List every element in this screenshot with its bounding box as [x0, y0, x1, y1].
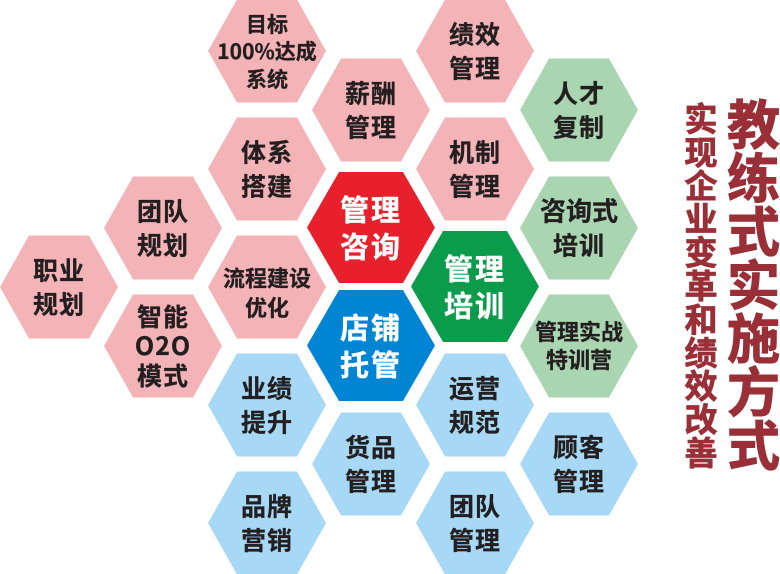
hexagon: 咨询式培训	[520, 176, 638, 280]
hexagon: 运营规范: 运营	[449, 370, 501, 406]
hexagon: 业绩提升	[208, 354, 326, 456]
core hexagon: 管理培训: 培训	[444, 284, 506, 326]
hexagon: 绩效管理: 管理	[449, 50, 501, 86]
hexagon: 业绩提升: 提升	[241, 404, 293, 440]
hexagon: 团队管理: 管理	[449, 522, 501, 558]
hexagon: 管理实战特训营	[520, 294, 638, 398]
hexagon: 品牌营销	[208, 472, 326, 574]
hexagon: 绩效管理	[416, 0, 534, 102]
hexagon: 流程建设优化	[208, 236, 326, 338]
hexagon: 人才复制: 人才	[553, 74, 605, 110]
subtitle: vertical text: 实现企业变革和绩效改善	[684, 93, 718, 475]
hexagon: 体系搭建	[208, 118, 326, 220]
hexagon: 团队管理: 团队	[449, 488, 501, 524]
core hexagon: 管理培训: 管理	[444, 246, 506, 288]
hexagon: 目标100%达成系统: 系统	[246, 64, 288, 94]
hexagon: 流程建设优化: 优化	[245, 291, 289, 323]
hexagon: 职业规划: 职业	[33, 252, 85, 288]
hexagon: 顾客管理: 顾客	[553, 428, 605, 464]
main title: vertical text: 教练式实施方式	[727, 84, 780, 481]
hexagon: 体系搭建: 体系	[241, 134, 293, 170]
hexagon: 机制管理	[416, 118, 534, 220]
hexagon: 咨询式培训: 咨询式	[540, 192, 618, 228]
hexagon: 运营规范	[416, 354, 534, 456]
hexagon: 管理实战特训营: 特训营	[546, 343, 612, 375]
hexagon: 流程建设优化: 流程建设	[223, 262, 311, 294]
hexagon: 货品管理: 管理	[345, 462, 397, 498]
hexagon: 薪酬管理: 薪酬	[345, 74, 397, 110]
hexagon: 咨询式培训: 培训	[553, 226, 605, 262]
hexagon: 体系搭建: 搭建	[241, 168, 293, 204]
hexagon: 管理实战特训营: 管理实战	[535, 315, 623, 347]
core hexagon: 管理咨询	[307, 172, 435, 283]
hexagon: 薪酬管理: 管理	[345, 108, 397, 144]
hexagon: 顾客管理	[520, 412, 638, 516]
hexagon: 货品管理	[312, 412, 430, 516]
hexagon: 品牌营销: 品牌	[241, 488, 293, 524]
hexagon: 人才复制: 复制	[553, 108, 605, 144]
hexagon: 运营规范: 规范	[449, 404, 501, 440]
hexagon: 智能O2O模式: O2O	[135, 327, 191, 363]
hexagon: 职业规划: 规划	[33, 286, 85, 322]
hexagon: 智能O2O模式: 智能	[137, 298, 189, 334]
hexagon: 智能O2O模式: 模式	[137, 357, 189, 393]
core hexagon: 管理咨询: 管理	[340, 188, 402, 230]
hexagon: 目标100%达成系统: 目标	[246, 9, 288, 39]
hexagon: 职业规划	[0, 236, 118, 338]
core hexagon: 管理培训	[411, 231, 539, 342]
hexagon: 机制管理: 管理	[449, 168, 501, 204]
core hexagon: 店铺托管: 托管	[340, 342, 402, 384]
hexagon: 目标100%达成系统	[208, 0, 326, 102]
hexagon: 团队规划: 规划	[137, 226, 189, 262]
hexagon: 绩效管理: 绩效	[449, 16, 501, 52]
hexagon: 团队规划	[104, 176, 222, 280]
hexagon: 智能O2O模式	[104, 294, 222, 398]
core hexagon: 店铺托管	[307, 290, 435, 401]
hexagon: 人才复制	[520, 58, 638, 162]
hexagon: 目标100%达成系统: 100%达成	[217, 36, 317, 66]
hexagon: 业绩提升: 业绩	[241, 370, 293, 406]
hexagon: 机制管理: 机制	[449, 134, 501, 170]
core hexagon: 店铺托管: 店铺	[340, 306, 402, 348]
core hexagon: 管理咨询: 咨询	[340, 224, 402, 266]
hexagon: 团队管理	[416, 472, 534, 574]
hexagon: 货品管理: 货品	[345, 428, 397, 464]
hexagon: 薪酬管理	[312, 58, 430, 162]
hexagon: 团队规划: 团队	[137, 192, 189, 228]
hexagon: 顾客管理: 管理	[553, 462, 605, 498]
hexagon: 品牌营销: 营销	[241, 522, 293, 558]
